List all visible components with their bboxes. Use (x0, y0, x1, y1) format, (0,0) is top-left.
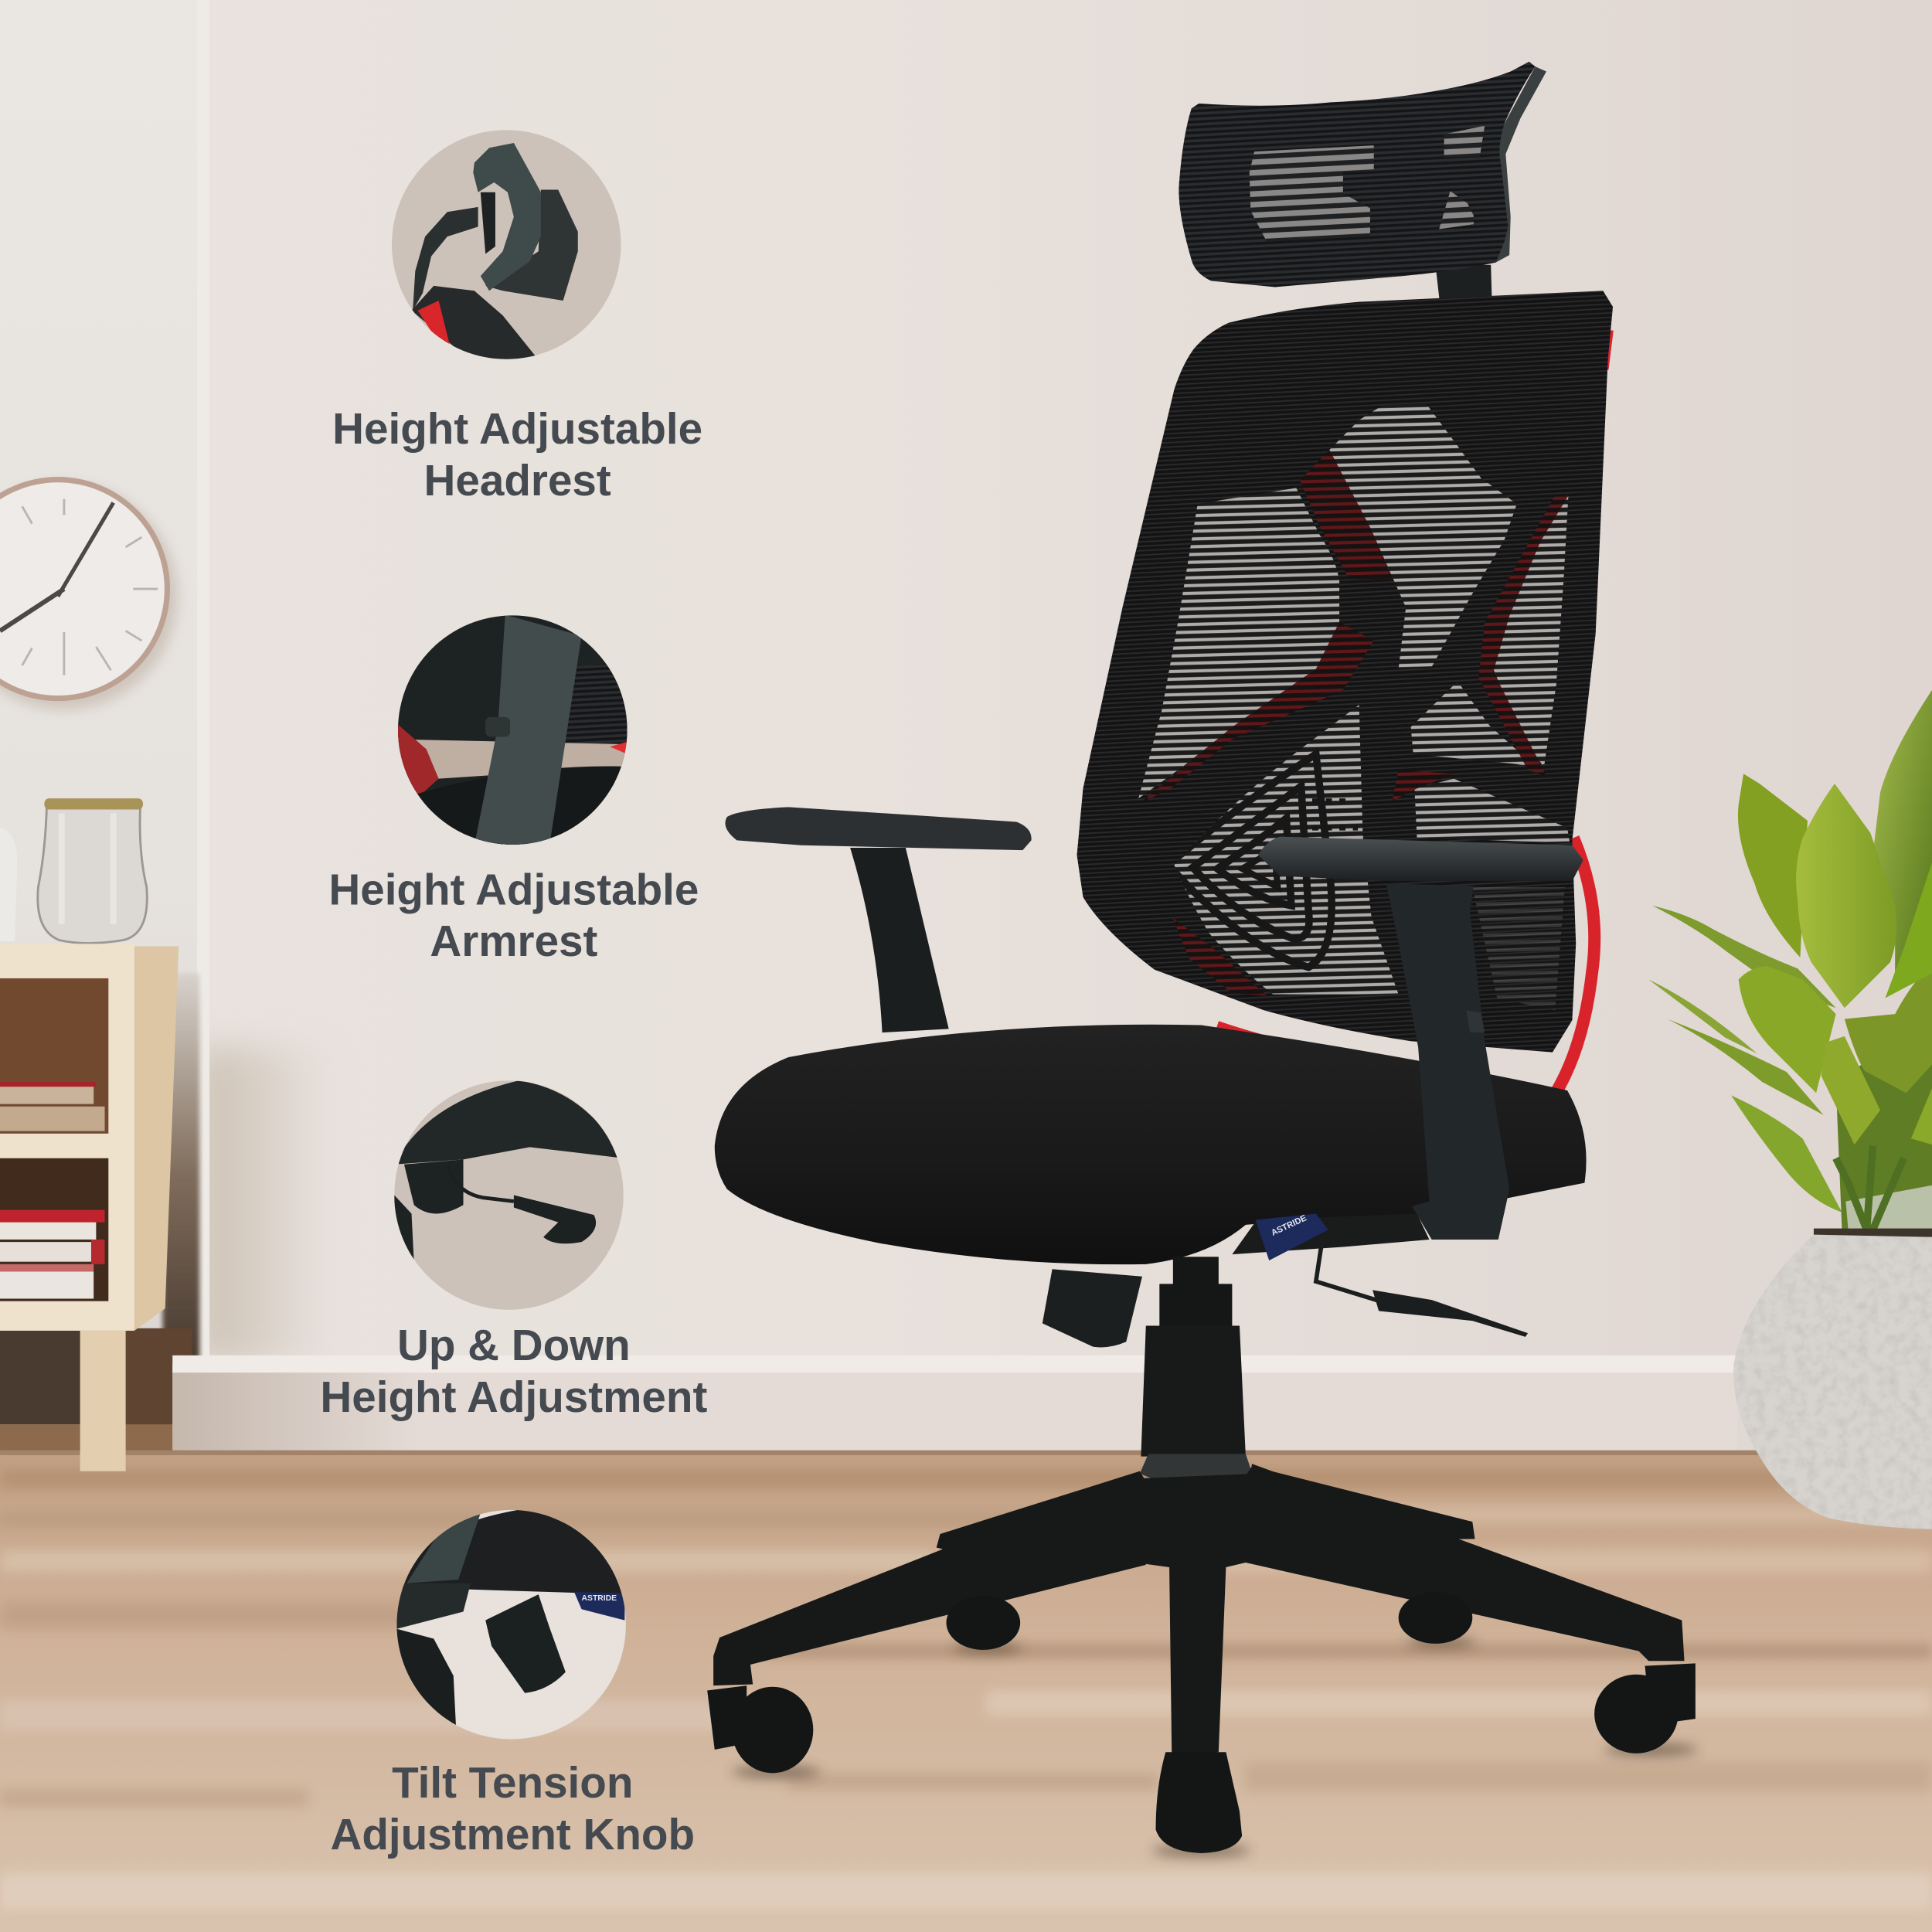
glass jar (0, 798, 147, 944)
height lever (1316, 1241, 1528, 1337)
pot body (1733, 1235, 1932, 1529)
room background (0, 0, 1932, 1466)
label: armrest line two: Armrest (430, 917, 598, 965)
label: tilt tension: Tilt Tension (392, 1758, 633, 1807)
star base (713, 1464, 1685, 1754)
label: height adjustment: Height Adjustment (320, 1372, 707, 1421)
left armrest (725, 807, 1032, 1032)
wooden shelf with books (0, 944, 179, 1471)
seat label tag: ASTRIDE (1270, 1213, 1308, 1238)
mesh backrest (1077, 291, 1613, 1053)
headrest (1179, 62, 1546, 308)
label: headrest line two: Headrest (424, 456, 611, 505)
detail circle: armrest (398, 615, 628, 845)
detail circle: height lever (394, 1080, 624, 1311)
floor shadows (732, 1638, 1698, 1857)
potted plant (1648, 690, 1932, 1529)
feature: tilt tension knob (330, 1509, 695, 1859)
detail circle: tilt knob (396, 1509, 628, 1740)
seat cushion (715, 1025, 1587, 1264)
seat label tag (1256, 1213, 1328, 1260)
label: up and down: Up & Down (397, 1321, 631, 1369)
label: adjustment knob: Adjustment Knob (330, 1810, 695, 1859)
feature: up and down height (320, 1080, 707, 1421)
label: height adjustable headrest: Height Adjustable (332, 404, 702, 453)
label: height adjustable armrest: Height Adjustable (328, 865, 699, 913)
detail circle: tilt knob: ASTRIDE (582, 1594, 617, 1603)
wall clock (0, 477, 178, 709)
office chair (707, 62, 1698, 1857)
right armrest (1258, 837, 1583, 1240)
feature: armrest (328, 615, 699, 965)
mesh swirl pattern (1168, 754, 1366, 968)
detail circle: headrest (392, 129, 621, 360)
mesh see-through panels (1138, 403, 1570, 1010)
feature: headrest (332, 129, 702, 505)
red frame seen through mesh (1140, 450, 1569, 995)
tilt tension knob (1043, 1269, 1142, 1347)
wooden floor (0, 1455, 1932, 1932)
gas cylinder (1140, 1257, 1253, 1481)
casters (707, 1592, 1696, 1853)
mechanism under seat (1232, 1213, 1429, 1254)
red frame (1217, 330, 1611, 1094)
